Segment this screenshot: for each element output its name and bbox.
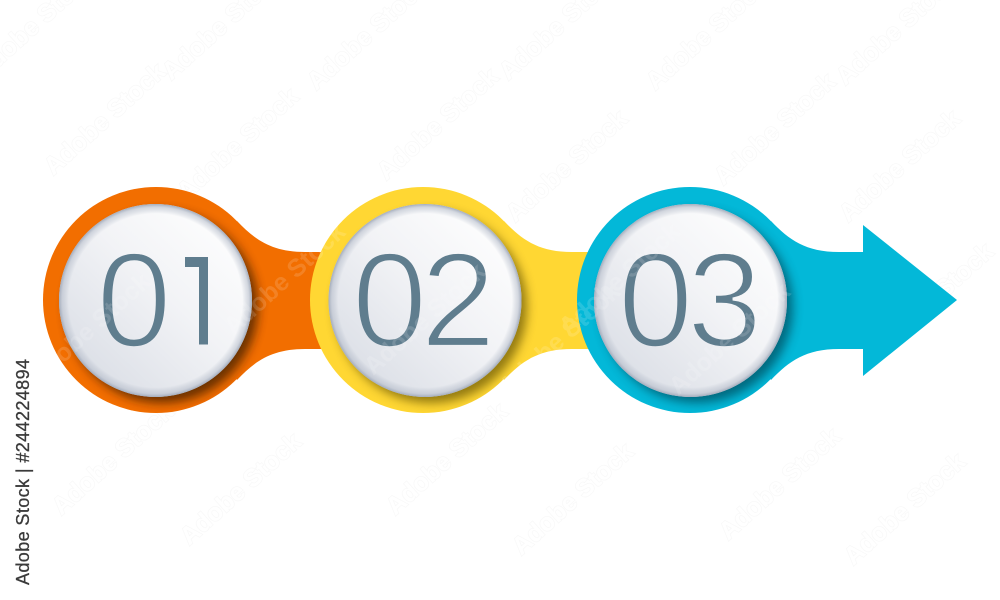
watermark overlay on shapes: Adobe Stock <box>24 267 156 391</box>
step 2: yellow connector <box>310 187 597 413</box>
number 01 <box>103 254 208 346</box>
watermark pattern: Adobe Stock <box>372 62 504 186</box>
badge 03 <box>594 204 787 397</box>
badge 01 <box>59 204 252 397</box>
number 03 <box>618 224 762 376</box>
watermark pattern: Adobe Stock <box>839 447 971 571</box>
number 03: 3 <box>687 224 762 376</box>
badge 02 <box>328 204 522 397</box>
watermark pattern: Adobe Stock <box>381 397 513 521</box>
watermark pattern: Adobe Stock <box>39 57 171 181</box>
watermark pattern: Adobe Stock <box>709 67 841 191</box>
watermark pattern: Adobe Stock <box>714 422 846 546</box>
number 03: 0 <box>618 224 693 376</box>
watermark pattern: Adobe Stock <box>47 397 179 521</box>
watermark overlay on shapes: Adobe Stock <box>554 217 686 341</box>
number 02: 2 <box>420 224 496 376</box>
watermark overlay on shapes: Adobe Stock <box>664 277 796 401</box>
watermark overlay on shapes: Adobe Stock <box>359 257 491 381</box>
watermark overlay on shapes: Adobe Stock <box>219 217 351 341</box>
number 02 <box>352 224 496 376</box>
watermark pattern: Adobe Stock <box>172 82 304 206</box>
number 02: 0 <box>352 224 427 376</box>
watermark overlay on shapes <box>24 217 796 401</box>
step 1: orange connector <box>43 187 330 413</box>
watermark pattern: Adobe Stock <box>834 104 966 228</box>
watermark pattern: Adobe Stock <box>175 427 307 551</box>
watermark pattern: Adobe Stock <box>507 437 639 561</box>
watermark overlay on shapes: Adobe Stock <box>494 277 626 401</box>
number 01: 1 <box>164 224 239 376</box>
watermark pattern: Adobe Stock <box>501 104 633 228</box>
number 01: 0 <box>96 224 172 376</box>
watermark pattern: Adobe Stock <box>867 237 999 361</box>
step 3: blue arrow <box>577 187 957 413</box>
stock id side label: Adobe Stock | #244224894 <box>13 359 33 585</box>
